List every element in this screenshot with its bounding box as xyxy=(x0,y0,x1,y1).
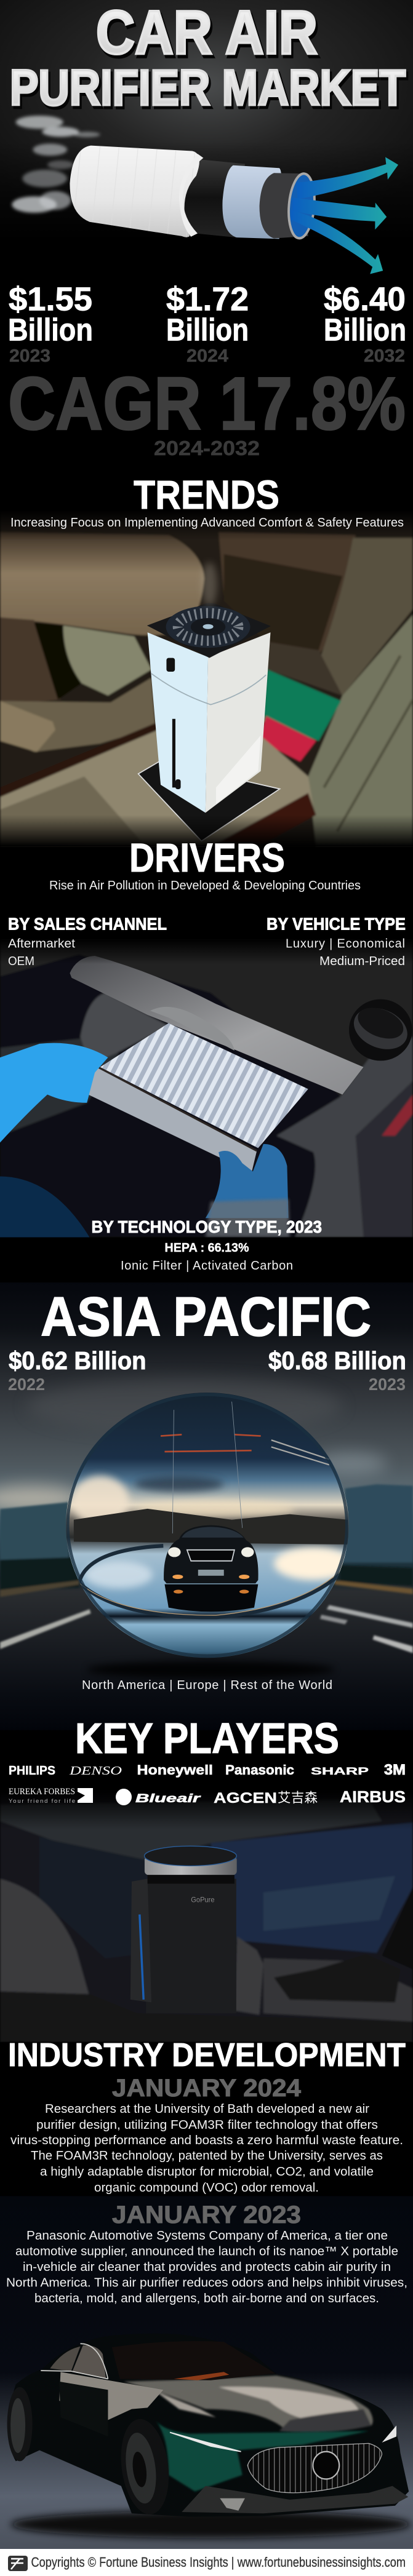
panel: trends photo xyxy=(0,510,413,846)
sleeve xyxy=(0,1177,89,1238)
side windows xyxy=(50,2347,81,2371)
footer logo xyxy=(8,2556,28,2571)
development: January 2023: North America. This air purifier reduces odors and helps inhibit viruses, xyxy=(6,2276,407,2289)
drivers text: Rise in Air Pollution in Developed & Developing Countries xyxy=(49,879,361,892)
development: January 2023: automotive supplier, announced the launch of its nanoe™ X portable xyxy=(15,2245,398,2259)
logo: Philips: PHILIPS xyxy=(9,1764,55,1778)
stat: asia pacific 2023 xyxy=(268,1346,406,1394)
green fender xyxy=(155,2420,369,2492)
silver flank xyxy=(59,2372,163,2420)
car in sphere xyxy=(164,1525,259,1612)
logo: Blueair: Blueair xyxy=(135,1792,202,1805)
stat: asia pacific 2023: 2023 xyxy=(369,1375,406,1394)
stat: asia pacific 2022 xyxy=(8,1346,146,1394)
logo: Eureka Forbes xyxy=(9,1787,93,1805)
car body xyxy=(9,2334,409,2517)
development: January 2023 xyxy=(6,2201,407,2305)
segment: by sales channel: Aftermarket xyxy=(8,937,75,951)
segment: by vehicle type: Medium-Priced xyxy=(319,955,405,968)
logo: Eureka Forbes: EUREKA FORBES xyxy=(9,1787,75,1797)
logo: Eureka Forbes: Your friend for life xyxy=(9,1798,75,1805)
segment: by technology type: BY TECHNOLOGY TYPE, 2023 xyxy=(91,1217,322,1236)
smoke xyxy=(12,116,100,213)
purifier xyxy=(147,603,271,813)
white outer filter xyxy=(70,146,203,237)
logo: AGCEN: AGCEN xyxy=(214,1790,277,1807)
arrows xyxy=(291,157,398,274)
cup holder tray xyxy=(138,761,279,841)
segment: by sales channel: BY SALES CHANNEL xyxy=(8,914,167,934)
panel: regional photo with glass sphere xyxy=(0,1282,413,1730)
illustration: air filter cartridge with airflow arrows xyxy=(12,116,398,274)
air vent xyxy=(348,1000,413,1061)
development: January 2024 xyxy=(10,2075,403,2195)
stat: 2024 market size: Billion xyxy=(166,312,249,347)
purifier: GoPure xyxy=(191,1896,215,1904)
development: January 2024: a highly adaptable disruptor for microbial, CO2, and volatile xyxy=(40,2165,374,2179)
development: January 2023: Panasonic Automotive Systems Company of America, a tier one xyxy=(26,2229,388,2243)
purifier xyxy=(130,1846,237,2013)
stat: 2032 market size: $6.40 xyxy=(324,280,406,317)
footer xyxy=(0,2549,413,2576)
development: January 2023: in-vehicle air cleaner that provides and protects cabin air purity in xyxy=(23,2260,391,2274)
logo: AGCEN xyxy=(214,1790,318,1807)
stat: 2023 market size: 2023 xyxy=(9,346,50,366)
other regions: North America | Europe | Rest of the World xyxy=(82,1679,332,1692)
header panel xyxy=(0,0,413,274)
title xyxy=(10,0,407,119)
stat: 2024 market size xyxy=(166,280,249,366)
development: January 2024: organic compound (VOC) odor removal. xyxy=(94,2181,319,2195)
development: January 2023: JANUARY 2023 xyxy=(112,2201,301,2228)
logo: Blueair xyxy=(116,1789,202,1805)
outlet ring and blue core xyxy=(286,172,317,239)
development: January 2023: bacteria, mold, and allergens, both air-borne and on surfaces. xyxy=(34,2292,379,2305)
development: January 2024: JANUARY 2024 xyxy=(112,2075,302,2102)
logo: Panasonic: Panasonic xyxy=(225,1762,294,1778)
logo: Denso: DENSO xyxy=(69,1764,122,1778)
stat: 2023 market size: $1.55 xyxy=(9,280,92,317)
development: January 2024: virus-stopping performance and boasts a zero harmful waste feature. xyxy=(10,2134,403,2147)
panel: concept car photo xyxy=(0,2196,413,2549)
logo: Sharp: SHARP xyxy=(311,1765,369,1777)
rear wheel xyxy=(7,2387,33,2461)
segment: by vehicle type: Luxury | Economical xyxy=(286,937,405,951)
trends text: Increasing Focus on Implementing Advanced Comfort & Safety Features xyxy=(10,516,404,530)
stat: 2023 market size: Billion xyxy=(8,312,93,347)
heading: drivers: DRIVERS xyxy=(129,835,285,880)
title: CAR AIR xyxy=(98,1,319,70)
stat: 2032 market size xyxy=(324,280,406,366)
segment: by sales channel xyxy=(8,914,167,968)
segment: by technology type: HEPA : 66.13% xyxy=(165,1241,249,1255)
filter xyxy=(88,1023,308,1173)
windscreen xyxy=(112,2341,275,2380)
glass sphere xyxy=(63,1391,353,1663)
stat: asia pacific 2022: $0.62 Billion xyxy=(9,1346,146,1375)
development: January 2024: The FOAM3R technology, patented by the University, serves as xyxy=(31,2149,383,2163)
hood highlights xyxy=(124,2375,373,2433)
left glove xyxy=(0,1043,108,1143)
logo: AGCEN: 艾吉森 xyxy=(278,1791,318,1805)
pale blue segment xyxy=(222,165,282,239)
panel: key players photo xyxy=(0,1791,413,2042)
CAGR period: 2024-2032 xyxy=(154,437,260,459)
black mesh segment xyxy=(182,158,245,237)
lower bumper xyxy=(182,2486,408,2513)
segment: by sales channel: OEM xyxy=(8,955,34,968)
stat: asia pacific 2022: 2022 xyxy=(8,1375,45,1394)
grille xyxy=(247,2443,382,2493)
heading: asia pacific: ASIA PACIFIC xyxy=(41,1287,371,1348)
glovebox lid xyxy=(70,956,364,1094)
heading: key players: KEY PLAYERS xyxy=(75,1714,339,1762)
development: January 2024: purifier design, utilizing FOAM3R filter technology that offers xyxy=(36,2118,378,2132)
segment: by technology type: Ionic Filter | Activated Carbon xyxy=(121,1259,293,1273)
right glove xyxy=(206,1144,289,1218)
segment: by technology type xyxy=(91,1217,322,1273)
panel: cabin filter photo xyxy=(0,939,413,1238)
logos: key players xyxy=(9,1762,406,1807)
logo: Airbus: AIRBUS xyxy=(340,1787,406,1806)
logo: Honeywell: Honeywell xyxy=(137,1762,213,1778)
development: January 2024: Researchers at the University of Bath developed a new air xyxy=(45,2102,369,2116)
stat: asia pacific 2023: $0.68 Billion xyxy=(268,1346,406,1375)
stat: 2032 market size: 2032 xyxy=(364,346,405,366)
dark mesh segment xyxy=(260,173,308,239)
stat: 2024 market size: $1.72 xyxy=(166,280,249,317)
stat: 2023 market size xyxy=(8,280,93,366)
title: CAR AIR xyxy=(96,0,318,67)
logo: 3M: 3M xyxy=(384,1762,406,1778)
front wheel xyxy=(116,2415,174,2518)
heading: trends: TRENDS xyxy=(134,472,279,517)
stat: 2024 market size: 2024 xyxy=(186,346,228,366)
segment: by vehicle type xyxy=(267,914,406,968)
